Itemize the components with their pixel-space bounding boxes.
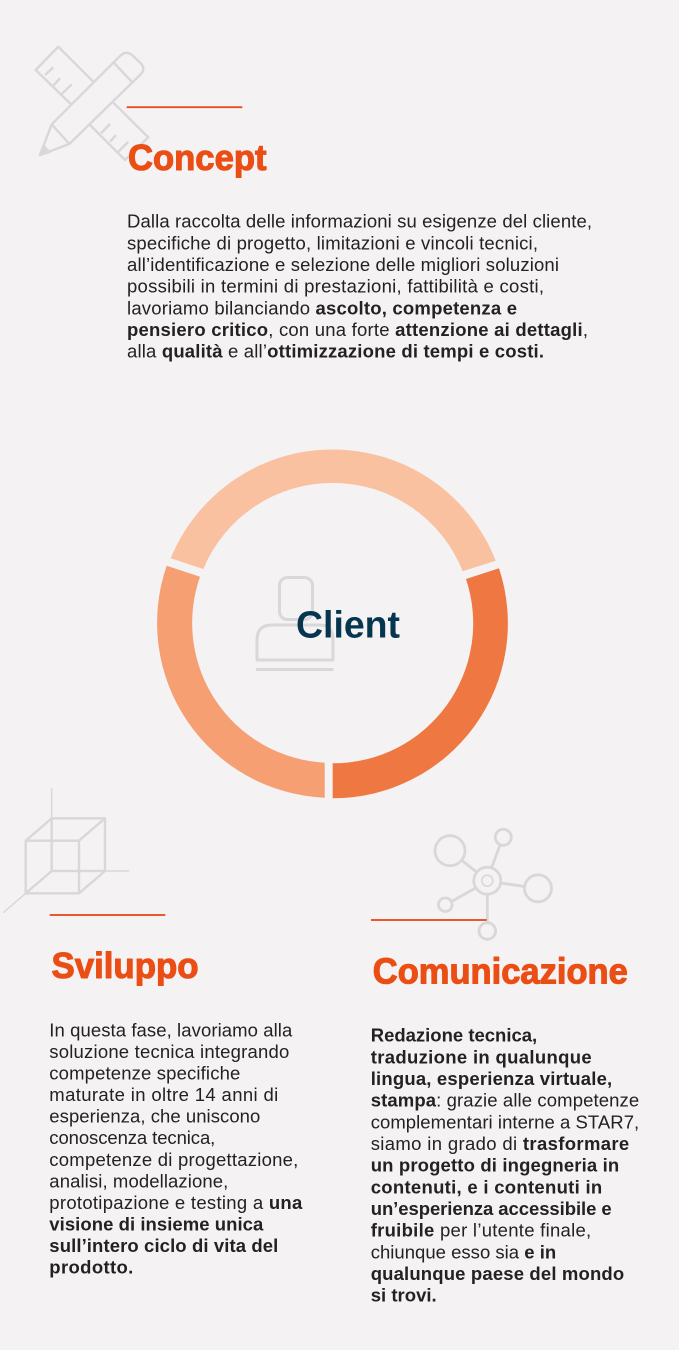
text block: Sviluppo description: visione di insieme unica — [49, 1213, 264, 1234]
heading: Concept: Concept — [128, 137, 267, 178]
text block: Comunicazione description: si trovi. — [371, 1285, 437, 1306]
text block: Comunicazione description: lingua, esperienza virtuale, — [371, 1068, 612, 1089]
icon: client person — [256, 578, 334, 670]
icon: wireframe cube — [3, 788, 129, 913]
text block: Sviluppo description: sull’intero ciclo di vita del — [49, 1235, 278, 1256]
text block: Sviluppo description: maturate in oltre 14 anni di — [49, 1084, 278, 1105]
text block: Sviluppo description: prototipazione e testing a una — [49, 1192, 303, 1213]
text block: Comunicazione description: un progetto di ingegneria in — [371, 1155, 619, 1176]
text block: Comunicazione description: chiunque esso sia e in — [371, 1241, 556, 1262]
text block: Comunicazione description: fruibile per l’utente finale, — [371, 1220, 591, 1241]
icon: network nodes — [435, 829, 552, 939]
text block: Sviluppo description: prodotto. — [49, 1256, 133, 1277]
ring segment: left — [157, 566, 325, 798]
text block: Sviluppo description: competenze di progettazione, — [49, 1149, 298, 1170]
concept divider rule — [127, 106, 242, 108]
text block: Sviluppo description: soluzione tecnica integrando — [49, 1041, 289, 1062]
heading: Comunicazione: Comunicazione — [373, 950, 628, 991]
text block: Concept description: Dalla raccolta delle informazioni su esigenze del cliente, — [127, 211, 592, 232]
text block: Comunicazione description: qualunque paese del mondo — [371, 1263, 624, 1284]
text block: Concept description: lavoriamo bilanciando ascolto, competenza e — [127, 297, 517, 318]
comunicazione divider rule — [371, 919, 487, 921]
ring segment: right — [333, 568, 508, 798]
text block: Concept description: possibili in termini di prestazioni, fattibilità e costi, — [127, 276, 544, 297]
icon: ruler and pencil — [36, 47, 148, 160]
text block: Sviluppo description — [49, 1020, 303, 1277]
label: Client: Client — [296, 605, 400, 647]
text block: Sviluppo description: conoscenza tecnica, — [49, 1127, 215, 1148]
text block: Comunicazione description: complementari interne a STAR7, — [371, 1111, 639, 1132]
text block: Comunicazione description: un’esperienza accessibile e — [371, 1198, 612, 1219]
text block: Sviluppo description: competenze specifiche — [49, 1063, 240, 1084]
text block: Concept description: all’identificazione e selezione delle migliori soluzioni — [127, 254, 559, 275]
text block: Concept description: alla qualità e all’ottimizzazione di tempi e costi. — [127, 341, 544, 362]
text block: Sviluppo description: esperienza, che uniscono — [49, 1106, 260, 1127]
sviluppo divider rule — [50, 914, 165, 916]
text block: Concept description: pensiero critico, con una forte attenzione ai dettagli, — [127, 319, 588, 340]
text block: Sviluppo description: analisi, modellazione, — [49, 1170, 228, 1191]
text block: Comunicazione description: siamo in grado di trasformare — [371, 1133, 629, 1154]
text block: Concept description — [127, 211, 592, 362]
ring segment: top — [171, 449, 496, 571]
text block: Comunicazione description: traduzione in qualunque — [371, 1046, 592, 1067]
text block: Comunicazione description: stampa: grazie alle competenze — [371, 1090, 639, 1111]
text block: Concept description: specifiche di progetto, limitazioni e vincoli tecnici, — [127, 232, 538, 253]
text block: Comunicazione description — [371, 1025, 639, 1306]
heading: Sviluppo: Sviluppo — [52, 945, 198, 986]
text block: Comunicazione description: Redazione tecnica, — [371, 1025, 537, 1046]
donut diagram — [157, 449, 508, 798]
text block: Comunicazione description: contenuti, e i contenuti in — [371, 1176, 602, 1197]
text block: Sviluppo description: In questa fase, lavoriamo alla — [49, 1020, 293, 1041]
